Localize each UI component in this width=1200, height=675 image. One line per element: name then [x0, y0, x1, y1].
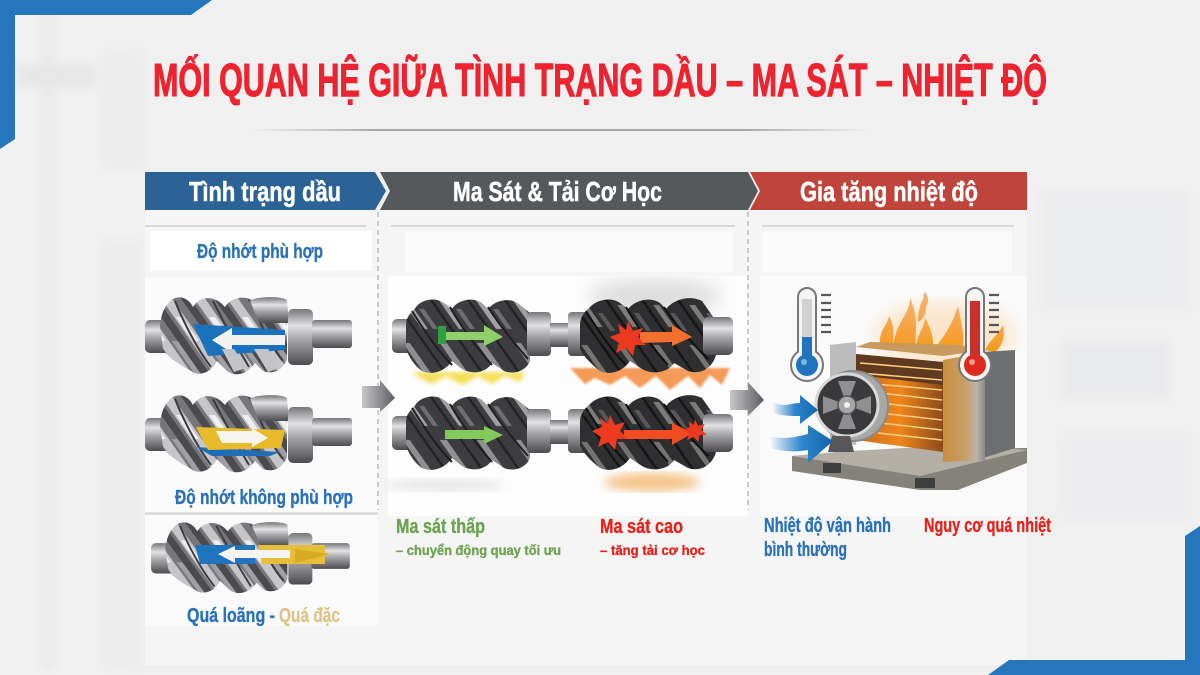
label: normal operating temperature: bình thường: [764, 539, 847, 561]
header: friction and mechanical load: [380, 172, 758, 210]
label: overheating risk: Nguy cơ quá nhiệt: [924, 515, 1051, 537]
screw: low friction bottom: [392, 397, 569, 470]
label: suitable viscosity: Độ nhớt phù hợp: [197, 241, 323, 263]
header band: [145, 172, 1027, 210]
header: oil condition: [145, 172, 386, 210]
airflow arrows: [770, 395, 833, 463]
screw: suitable viscosity with blue oil: [145, 297, 352, 374]
label: normal operating temperature: [764, 515, 891, 561]
label: high friction: [600, 516, 705, 558]
illustration: overheating radiator with fan: [770, 288, 1027, 490]
header: friction and mechanical load: Ma Sát & Tải Cơ Học: [453, 176, 662, 207]
header: temperature rise: Gia tăng nhiệt độ: [800, 176, 978, 207]
label: high friction: Ma sát cao: [600, 516, 683, 538]
radiator side panels: [830, 342, 856, 445]
label: high friction: – tăng tải cơ học: [600, 542, 705, 558]
scene: friction smoke and flames: [385, 280, 730, 491]
screw: high friction bottom: [568, 395, 733, 470]
screw: unsuitable viscosity with yellow oil: [145, 395, 352, 472]
label: normal operating temperature: Nhiệt độ vận hành: [764, 515, 891, 537]
arrow: oil to friction: [362, 380, 395, 412]
screw: thin and thick oil: [151, 522, 350, 593]
arrow: friction to temperature: [730, 382, 764, 416]
label: too thin, too thick: Quá đặc: [279, 605, 340, 627]
label: low friction: Ma sát thấp: [396, 516, 485, 538]
corner accent: top left: [0, 0, 212, 149]
thermometer: overheating: [959, 288, 999, 381]
label: too thin, too thick: Quá loãng -: [187, 605, 275, 627]
corner accent: bottom right: [988, 526, 1200, 675]
cooling fan: [816, 371, 888, 452]
thermometer: normal: [791, 288, 831, 381]
radiator flames: [875, 292, 1015, 367]
screw: high friction top: [568, 298, 733, 373]
title divider: [248, 129, 872, 131]
header: temperature rise: [750, 172, 1027, 210]
pallet base: [792, 448, 1027, 490]
label: low friction: – chuyển động quay tối ưu: [396, 542, 561, 558]
label: unsuitable viscosity: Độ nhớt không phù hợp: [175, 487, 353, 509]
screw: low friction top: [392, 300, 569, 373]
panel: content background: [145, 210, 1027, 665]
header: oil condition: Tình trạng dầu: [189, 176, 341, 207]
label: low friction: [396, 516, 561, 558]
radiator core: [856, 354, 943, 452]
